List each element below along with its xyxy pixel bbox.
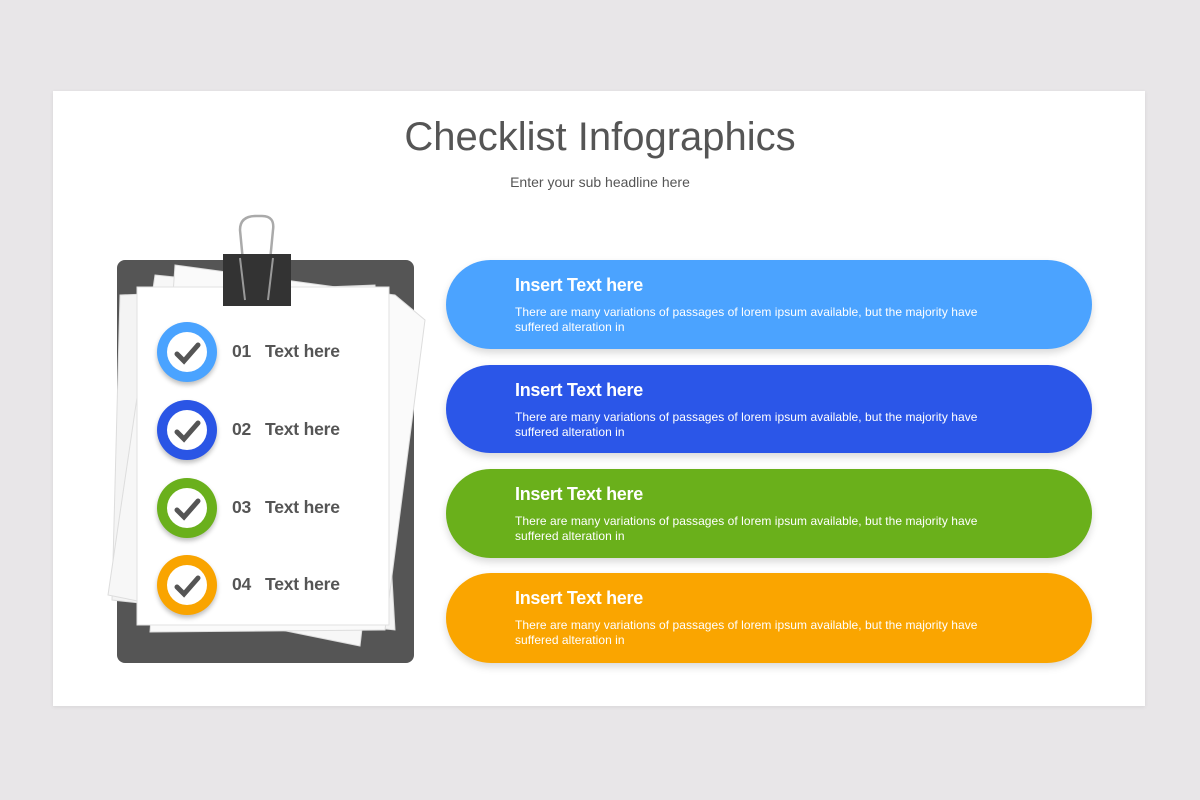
subtitle: Enter your sub headline here xyxy=(510,174,690,190)
pill 4 xyxy=(446,573,1092,663)
pill 4: Insert Text here xyxy=(515,588,643,608)
pill 3 xyxy=(446,469,1092,558)
pill 3: There are many variations of passages of lorem ipsum available, but the majority have suffered alteration in xyxy=(515,514,977,543)
item 01: 01 Text here xyxy=(232,341,340,361)
pill 2: Insert Text here xyxy=(515,380,643,400)
clipboard xyxy=(108,214,426,663)
pill 1 xyxy=(446,260,1092,349)
item 02: 02 Text here xyxy=(232,419,340,439)
item 04: 04 Text here xyxy=(232,574,340,594)
pill 3: Insert Text here xyxy=(515,484,643,504)
title: Checklist Infographics xyxy=(404,115,796,159)
slide card xyxy=(53,91,1145,706)
pill 1: There are many variations of passages of lorem ipsum available, but the majority have suffered alteration in xyxy=(515,305,977,334)
pill 2: There are many variations of passages of lorem ipsum available, but the majority have suffered alteration in xyxy=(515,410,977,439)
item 03: 03 Text here xyxy=(232,497,340,517)
pill 4: There are many variations of passages of lorem ipsum available, but the majority have suffered alteration in xyxy=(515,618,977,647)
pill 2 xyxy=(446,365,1092,453)
pill 1: Insert Text here xyxy=(515,275,643,295)
item 01 xyxy=(154,322,340,388)
item 02 xyxy=(154,400,340,466)
item 04 xyxy=(154,555,340,620)
item 03 xyxy=(154,478,340,544)
